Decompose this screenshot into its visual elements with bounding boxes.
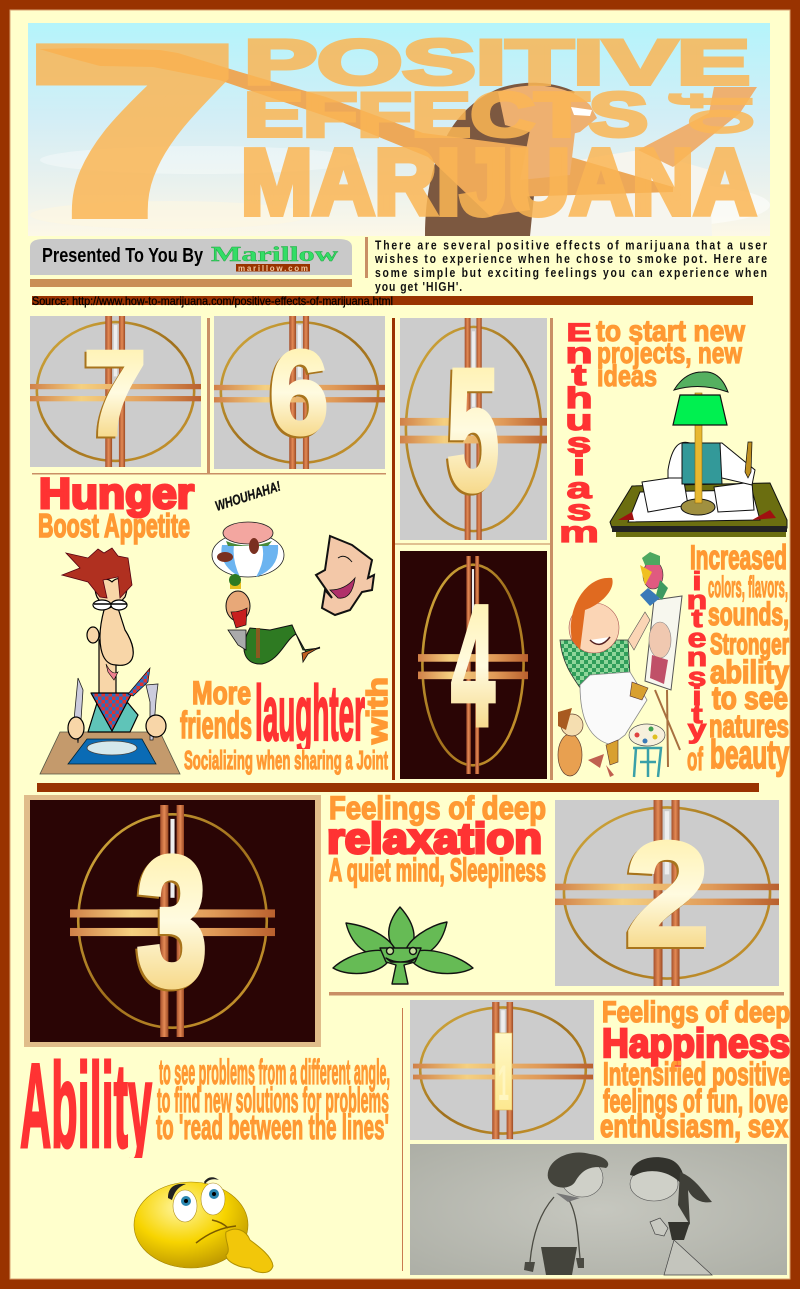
cartoon: laughing bald head: [316, 536, 374, 615]
palette and stool: [588, 724, 665, 777]
illustration: man writing at desk with lamp: [610, 372, 787, 537]
hero banner: [28, 2, 775, 261]
text block: to start new projects: [596, 315, 746, 393]
hero photo: sky and woman: [28, 23, 770, 236]
cartoon: man with green hat: [226, 574, 320, 664]
vertical word: intensity: intensity: [687, 568, 707, 744]
girl figure: [630, 1157, 712, 1275]
boy figure: [524, 1152, 608, 1275]
intro paragraph: wishes to experience when he chose to smoke pot. Here are: [374, 252, 767, 266]
text block: to start new projects: to start new: [596, 315, 746, 348]
source bar: [32, 294, 753, 308]
tile: number 7: [30, 316, 201, 467]
tile: number 4: [400, 551, 547, 779]
heading: feelings of deep relaxation: A quiet mind, Sleepiness: [329, 852, 546, 888]
caption: socializing: Socializing when sharing a Joint: [184, 745, 388, 775]
text block: see problems from different angle: [156, 1053, 390, 1147]
heading: Hunger: Hunger: [39, 470, 194, 518]
heading: feelings of deep relaxation: [327, 790, 546, 888]
intro paragraph: some simple but exciting feelings you can experience when: [375, 266, 767, 280]
illustration: sketched couple: [410, 1144, 787, 1275]
text block: to start new projects: ideas: [597, 360, 657, 393]
presented-by panel: [30, 239, 352, 287]
heading: feelings of deep relaxation: relaxation: [327, 815, 542, 863]
text block: Increased ... natures beauty: [687, 539, 789, 777]
presented by text: Presented To You By: [42, 245, 204, 267]
text: Ability: [20, 1039, 152, 1173]
title: 7: 7: [33, 2, 232, 261]
marillow logo: Marillow: [211, 242, 339, 266]
cartoon: man on beach ball: [212, 522, 284, 577]
intro paragraph: There are several positive effects of marijuana that a user: [375, 238, 767, 253]
tile: number 5: 5: [447, 334, 499, 526]
intro paragraph: you get 'HIGH'.: [375, 280, 462, 294]
title: MARIJUANA: MARIJUANA: [241, 130, 756, 234]
text: to see problems from a different angle,: [159, 1053, 390, 1092]
tile: number 3: [24, 795, 321, 1047]
marillow.com badge: marillow.com: [238, 264, 308, 273]
tile: number 5: [400, 318, 547, 540]
tile: number 2: 2: [625, 812, 710, 977]
text block: More friends laughter with: with: [362, 677, 394, 745]
tile: number 1: [410, 1000, 594, 1140]
tile: number 2: [555, 800, 779, 986]
text block: Increased ... natures beauty: of: [687, 741, 703, 777]
text: laughter: [255, 669, 365, 757]
title: EFFECTS: EFFECTS: [244, 81, 648, 150]
tile: number 1: 1: [498, 1055, 509, 1111]
vertical word: Enthusiasm: E: [566, 318, 592, 346]
title: POSITIVE: POSITIVE: [244, 28, 750, 98]
illustration: boy painter with parrot and dog: [558, 552, 682, 777]
source bar: Source: http://www.how-to-marijuana.com/positive-effects-of-marijuana.html: [32, 294, 393, 308]
illustration: hungry man at table: [40, 548, 180, 774]
dog: [558, 708, 583, 776]
text block: More friends laughter with: More: [192, 675, 251, 711]
subheading: Boost Appetite: Boost Appetite: [38, 507, 190, 544]
WHOUHAHA caption: WHOUHAHA!: [213, 478, 283, 514]
boy: [560, 578, 650, 765]
tile: number 4: 4: [451, 570, 495, 762]
text: to find new solutions for problems: [157, 1081, 389, 1120]
text block: to start new projects: projects, new: [597, 337, 743, 370]
illustration: laughing cartoons: [212, 478, 374, 664]
parrot: [640, 552, 668, 606]
easel and canvas: [645, 596, 682, 767]
heading: feelings of deep happiness: [600, 996, 790, 1144]
tile: number 6: [214, 316, 385, 469]
icon: thinking emoji: [134, 1177, 273, 1273]
text block: More friends laughter with: [180, 678, 388, 749]
heading: feelings of deep relaxation: Feelings of deep: [329, 790, 546, 826]
text block: Increased ... natures beauty: ability: [710, 654, 789, 690]
text block: see problems from different angle: to 'read between the lines': [156, 1108, 389, 1147]
hero banner: of: [650, 94, 775, 135]
vertical word: Enthusiasm: nthusiasm: [559, 336, 599, 549]
tile: number 3: 3: [137, 819, 207, 1023]
text block: More friends laughter with: friends: [180, 705, 252, 747]
tile: number 7: 7: [83, 325, 147, 461]
tile: number 6: 6: [269, 326, 329, 460]
dividers: [207, 318, 210, 473]
illustration: marijuana leaf character: [333, 907, 473, 984]
intro paragraph: [365, 237, 767, 294]
